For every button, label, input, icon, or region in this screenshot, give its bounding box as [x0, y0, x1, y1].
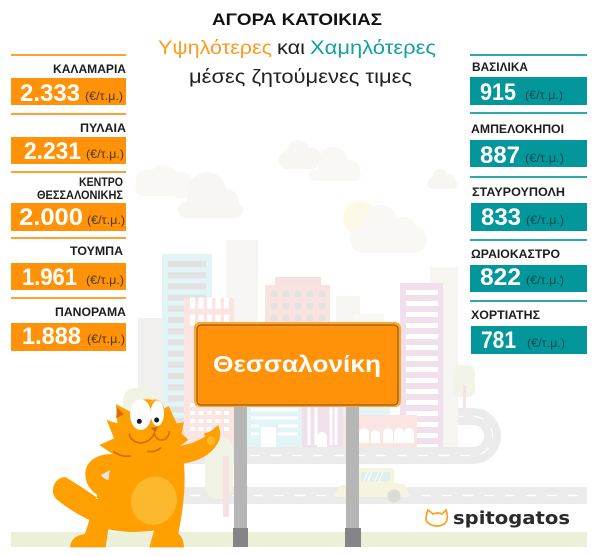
- item: Σταυρούπολη: [470, 176, 587, 231]
- item: Κέντρο Θεσσαλονίκης: (€/τ.μ.): [87, 213, 125, 227]
- sign: Θεσσαλονίκη: Θεσσαλονίκη: [213, 351, 381, 377]
- item: Τούμπα: ΤΟΥΜΠΑ: [70, 246, 123, 258]
- item: Χορτιάτης: ΧΟΡΤΙΑΤΗΣ: [471, 310, 540, 322]
- item: Πυλαία: ΠΥΛΑΙΑ: [80, 123, 126, 135]
- item: Πυλαία: [11, 113, 126, 165]
- item: Ωραιόκαστρο: ΩΡΑΙΟΚΑΣΤΡΟ: [471, 249, 560, 261]
- item: Πανόραμα: 1.888: [22, 323, 81, 350]
- item: Βασιλικά: [470, 54, 587, 106]
- item: Αμπελόκηποι: [470, 112, 587, 169]
- item: Αμπελόκηποι: 887: [480, 142, 520, 169]
- item: Σταυρούπολη: 833: [481, 204, 521, 231]
- item: Χορτιάτης: 781: [481, 327, 516, 354]
- background: buildings: [138, 240, 458, 447]
- logo: spitogatos: spitogatos: [453, 508, 570, 529]
- item: Πυλαία: 2.231: [24, 138, 81, 165]
- title: Υψηλότερες: [158, 38, 272, 59]
- item: Χορτιάτης: (€/τ.μ.): [527, 336, 565, 350]
- background: clouds and sun: [135, 140, 458, 253]
- item: Καλαμαριά: [11, 54, 126, 107]
- item: Σταυρούπολη: (€/τ.μ.): [526, 213, 564, 227]
- panel: lowest prices: [470, 54, 587, 354]
- item: Τούμπα: [11, 237, 126, 291]
- item: Τούμπα: (€/τ.μ.): [86, 273, 124, 287]
- item: Ωραιόκαστρο: 822: [480, 264, 521, 291]
- title: [158, 10, 436, 88]
- item: Αμπελόκηποι: (€/τ.μ.): [525, 151, 564, 165]
- item: Πανόραμα: [11, 297, 126, 351]
- item: Πυλαία: (€/τ.μ.): [86, 147, 124, 161]
- item: Ωραιόκαστρο: [470, 239, 587, 292]
- background: roads: [183, 416, 587, 504]
- background: trees: [123, 365, 475, 517]
- item: Βασιλικά: ΒΑΣΙΛΙΚΑ: [472, 62, 528, 74]
- item: Σταυρούπολη: ΣΤΑΥΡΟΥΠΟΛΗ: [472, 187, 565, 199]
- item: Καλαμαριά: (€/τ.μ.): [85, 89, 123, 103]
- item: Κέντρο Θεσσαλονίκης: ΚΕΝΤΡΟ: [79, 177, 123, 189]
- item: Τούμπα: 1.961: [22, 264, 77, 291]
- item: Αμπελόκηποι: ΑΜΠΕΛΟΚΗΠΟΙ: [471, 124, 564, 136]
- item: Καλαμαριά: 2.333: [20, 80, 80, 107]
- item: Ωραιόκαστρο: (€/τ.μ.): [526, 273, 564, 287]
- cat mascot: [53, 399, 220, 547]
- item: Πανόραμα: (€/τ.μ.): [87, 332, 125, 346]
- title: ΑΓΟΡΑ ΚΑΤΟΙΚΙΑΣ: [212, 10, 382, 29]
- item: Πανόραμα: ΠΑΝΟΡΑΜΑ: [55, 307, 126, 319]
- item: Καλαμαριά: ΚΑΛΑΜΑΡΙΑ: [53, 64, 126, 76]
- item: Χορτιάτης: [470, 300, 587, 354]
- title: Χαμηλότερες: [310, 38, 436, 59]
- item: Βασιλικά: 915: [480, 79, 516, 106]
- item: Βασιλικά: (€/τ.μ.): [525, 88, 563, 102]
- title: και: [277, 38, 305, 59]
- sign posts: [233, 400, 361, 547]
- item: Κέντρο Θεσσαλονίκης: 2.000: [19, 204, 83, 231]
- sign: Θεσσαλονίκη: [194, 322, 401, 407]
- panel: highest prices: [11, 54, 126, 351]
- item: Κέντρο Θεσσαλονίκης: ΘΕΣΣΑΛΟΝΙΚΗΣ: [37, 190, 123, 202]
- background: bus: [335, 468, 409, 502]
- title: μέσες ζητούμενες τιμες: [189, 67, 412, 88]
- background: ground strip: [11, 532, 587, 547]
- item: Κέντρο Θεσσαλονίκης: [11, 171, 126, 231]
